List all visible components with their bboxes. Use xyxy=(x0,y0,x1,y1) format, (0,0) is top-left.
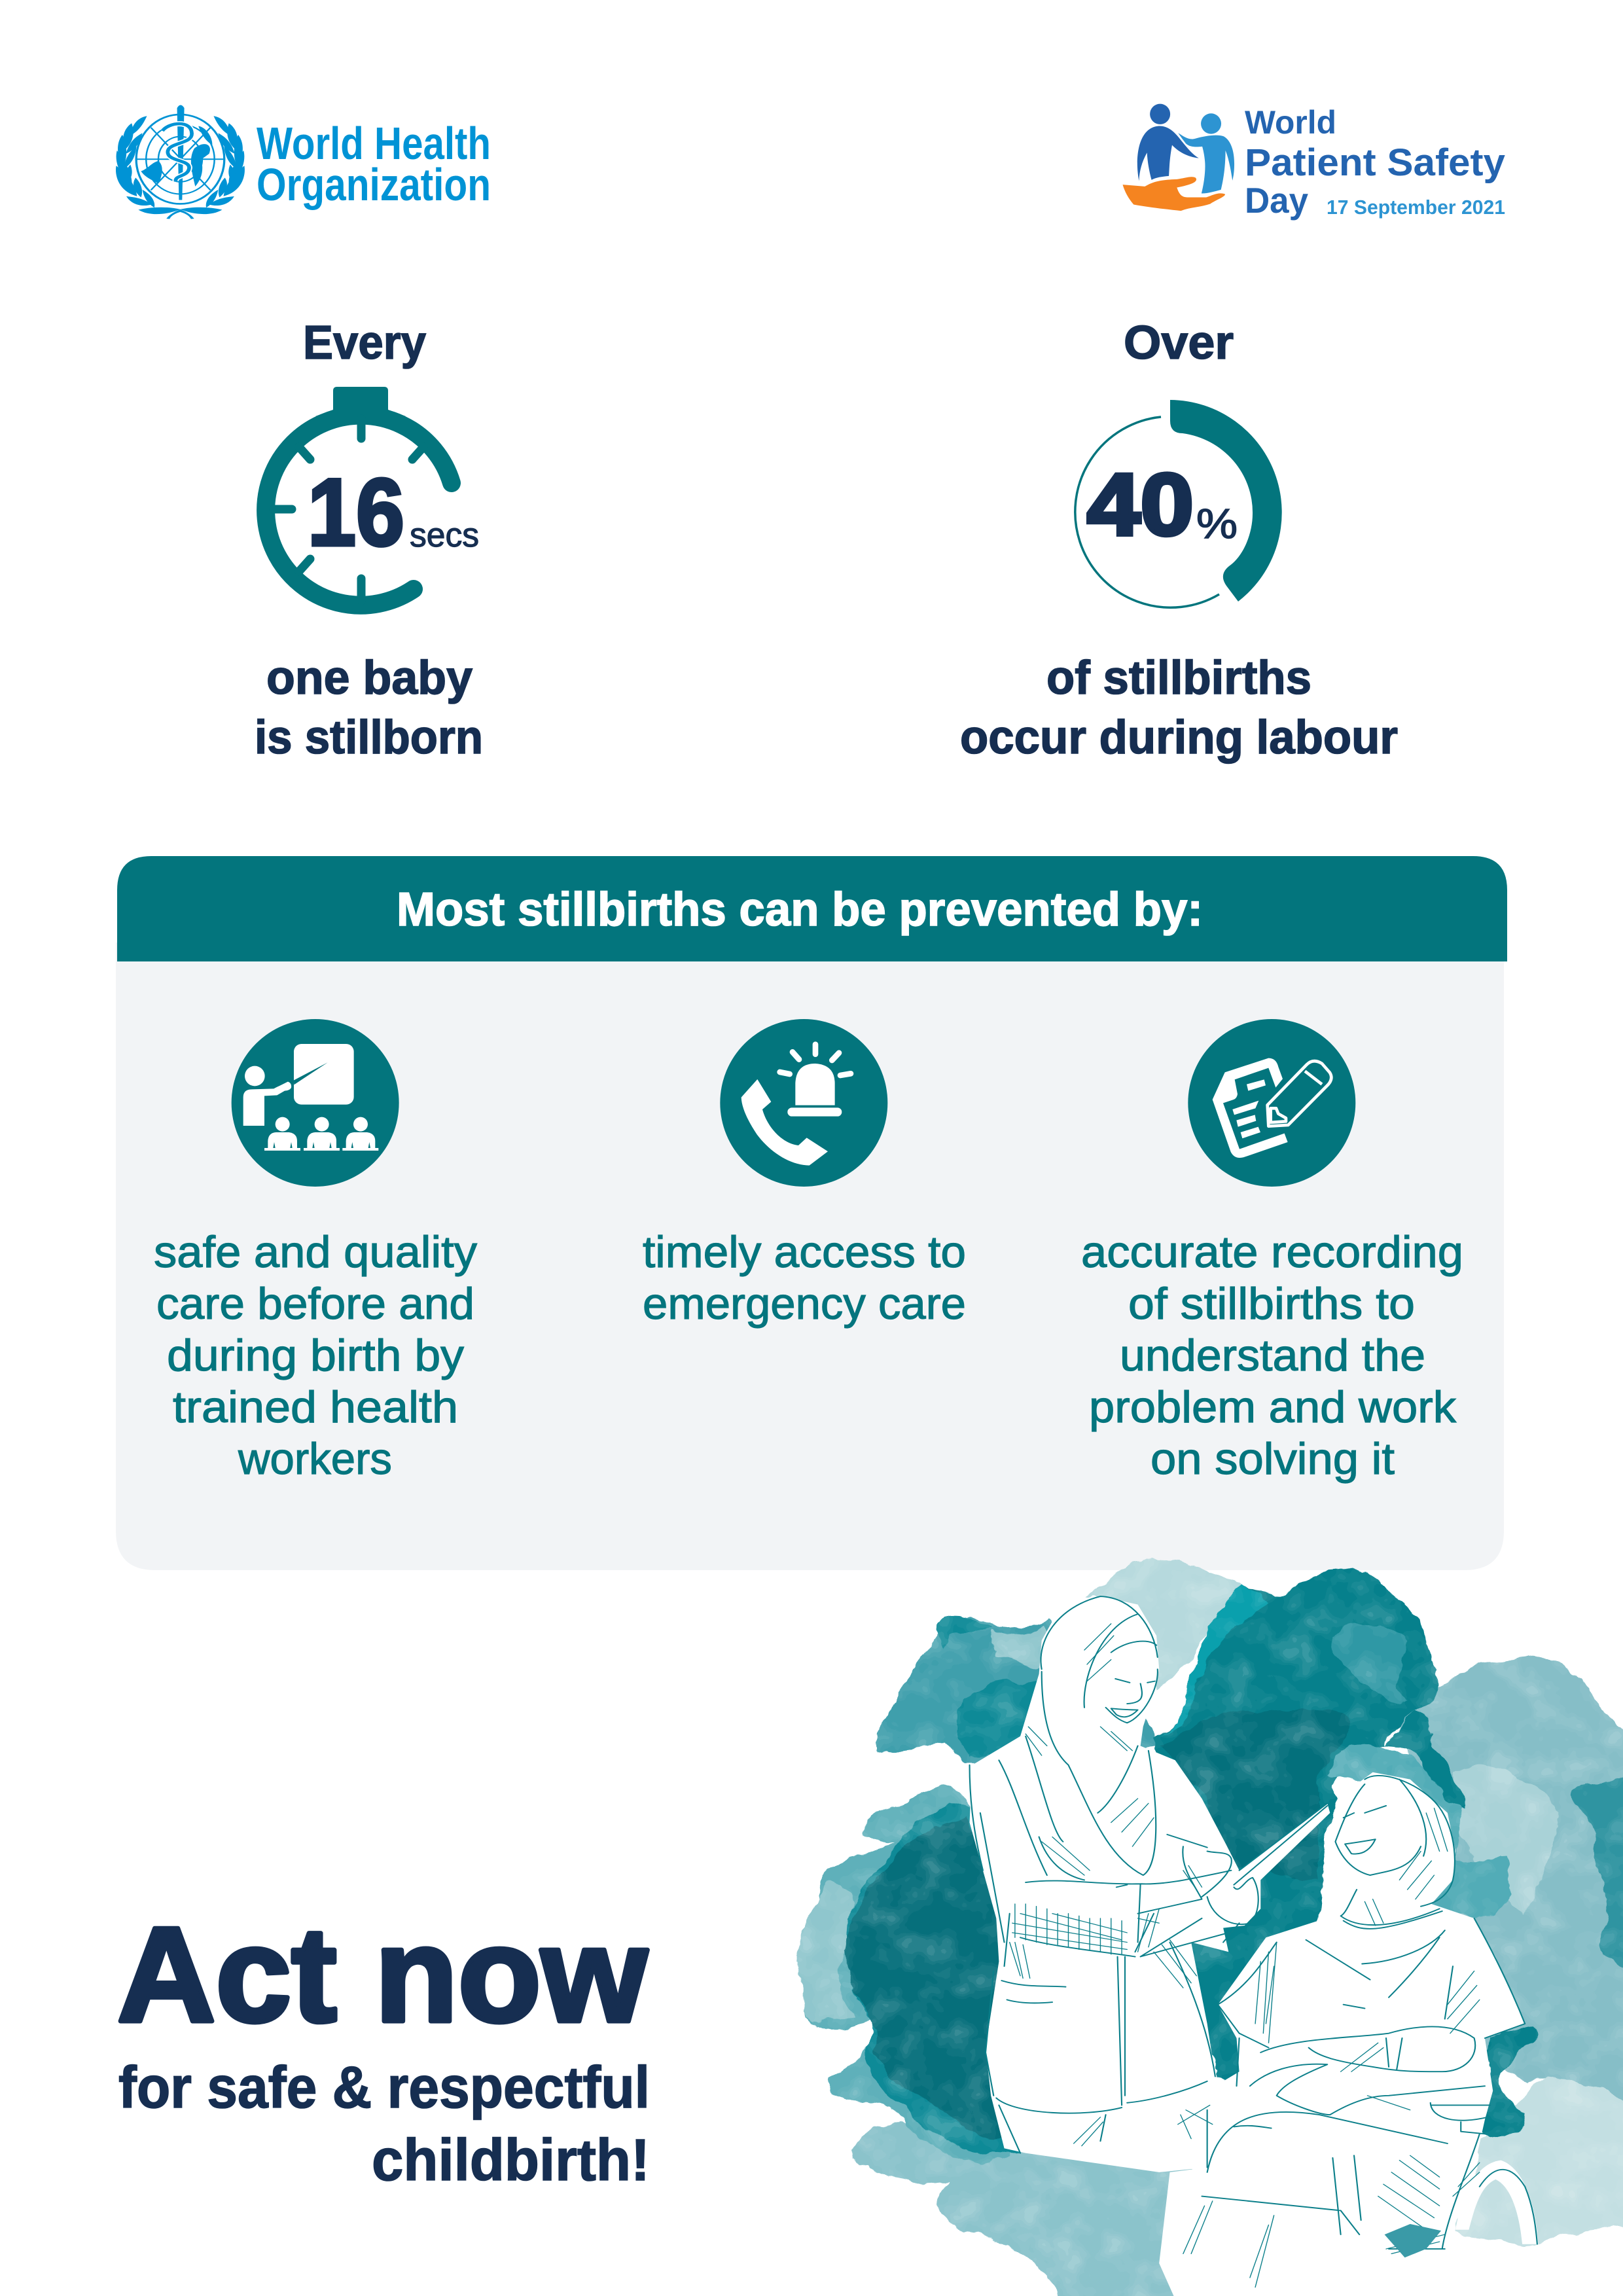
watercolour background xyxy=(800,1559,1623,2296)
text: accurate recording of stillbirths xyxy=(1081,1227,1463,1484)
percent sign: % xyxy=(1196,500,1238,547)
panel background xyxy=(116,942,1504,1570)
icon: document and pencil xyxy=(1188,1019,1355,1187)
caption: of stillbirths occur during labour: of stillbirths xyxy=(1046,652,1311,704)
call to action xyxy=(117,1899,650,2193)
tagline: for safe and respectful childbirth xyxy=(118,2055,650,2193)
panel heading: Most stillbirths can be prevented by: xyxy=(397,884,1203,936)
headline: Act now: Act now xyxy=(117,1899,648,2050)
text: care before and during birth: trained health xyxy=(173,1382,458,1432)
tagline: for safe and respectful childbirth: childbirth! xyxy=(372,2128,650,2193)
logo wordmark xyxy=(1245,104,1505,221)
statistic: over 40 percent xyxy=(960,317,1398,764)
chart: 40 percent ring xyxy=(1075,400,1282,607)
logo wordmark: World xyxy=(1245,104,1336,141)
icon: stopwatch xyxy=(266,387,452,605)
number 40: 40 xyxy=(1087,456,1194,554)
panel: prevention xyxy=(116,856,1507,1570)
text: accurate recording of stillbirths: on solving it xyxy=(1150,1434,1395,1484)
panel header bar xyxy=(117,856,1507,961)
text: accurate recording of stillbirths: accurate recording xyxy=(1081,1227,1463,1277)
figure: nurse xyxy=(970,1596,1330,2172)
text: accurate recording of stillbirths: problem and work xyxy=(1089,1382,1457,1432)
logo wordmark: Day xyxy=(1245,180,1308,221)
caption: one baby is stillborn xyxy=(255,652,483,764)
text: care before and during birth: safe and quality xyxy=(154,1227,477,1277)
text: accurate recording of stillbirths: understand the xyxy=(1120,1331,1425,1380)
text: care before and during birth: care before and xyxy=(156,1279,474,1329)
unit: secs: secs xyxy=(410,516,479,554)
icon: WHO emblem xyxy=(116,105,245,219)
text: timely access to emergency care: emergency care xyxy=(643,1279,966,1329)
text: accurate recording of stillbirths: of stillbirths to xyxy=(1128,1279,1415,1329)
WHO wordmark: World Health xyxy=(257,118,491,169)
column: emergency care xyxy=(643,1019,966,1329)
WHO wordmark: Organization xyxy=(257,159,491,210)
column: safe and quality care xyxy=(154,1019,477,1484)
text: timely access to emergency care xyxy=(643,1227,966,1329)
column: accurate recording xyxy=(1081,1019,1463,1484)
statistic: every 16 seconds xyxy=(255,317,483,764)
heading: Over: Over xyxy=(1124,317,1234,369)
caption: one baby is stillborn: is stillborn xyxy=(255,711,483,764)
text: care before and during birth: during birth by xyxy=(167,1331,464,1380)
figure: mother with newborn in wheelchair xyxy=(1159,1772,1539,2296)
text: care before and during birth xyxy=(154,1227,477,1484)
text: care before and during birth: workers xyxy=(238,1434,392,1484)
WHO wordmark xyxy=(257,118,491,210)
heading: Every: Every xyxy=(303,317,426,369)
illustration: nurse and mother with newborn on watercolour xyxy=(800,1559,1623,2296)
icon: trainer and students xyxy=(232,1019,399,1187)
logo wordmark: Patient Safety xyxy=(1245,141,1505,184)
caption: one baby is stillborn: one baby xyxy=(266,652,473,704)
icon: people and caring hand xyxy=(1122,104,1234,211)
icon: phone and alarm xyxy=(720,1019,887,1187)
WHO logo xyxy=(116,105,491,219)
number 16: 16 xyxy=(308,459,404,565)
World Patient Safety Day logo xyxy=(1122,104,1505,221)
tagline: for safe and respectful childbirth: for safe & respectful xyxy=(118,2055,650,2121)
logo date: 17 September 2021 xyxy=(1327,196,1505,219)
text: timely access to emergency care: timely access to xyxy=(643,1227,966,1277)
caption: of stillbirths occur during labour: occur during labour xyxy=(960,711,1398,764)
caption: of stillbirths occur during labour xyxy=(960,652,1398,764)
